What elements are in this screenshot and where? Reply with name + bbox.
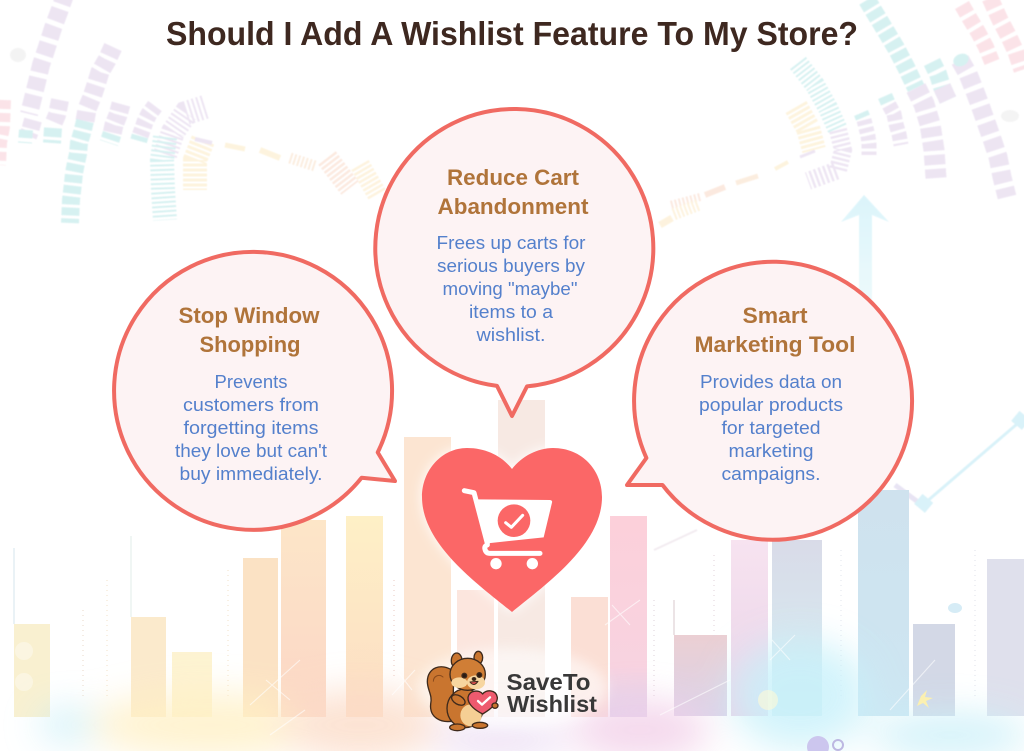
bubble: smart marketing tool: marketing [728, 441, 814, 461]
bubble: smart marketing tool: Provides data on [700, 372, 842, 392]
bubble: stop window shopping: buy immediately. [180, 464, 322, 484]
background: radial sound-wave arcs, left [0, 0, 378, 223]
bubble: smart marketing tool: campaigns. [722, 464, 820, 484]
background: up arrow [841, 195, 889, 300]
bubble: reduce cart abandonment: Abandonment [438, 194, 589, 219]
bubble: reduce cart abandonment: Frees up carts for [436, 233, 586, 253]
bubble: reduce cart abandonment: serious buyers by [437, 256, 585, 276]
bubble: smart marketing tool: Smart [742, 303, 808, 328]
bubble: reduce cart abandonment: Reduce Cart [447, 165, 579, 190]
icon: squirrel mascot [427, 651, 498, 731]
bubble: stop window shopping: Shopping [200, 332, 300, 357]
title: Should I Add A Wishlist Feature To My Store? [166, 15, 858, 52]
bubble: stop window shopping: Prevents [214, 372, 288, 392]
bubble: stop window shopping: they love but can't [175, 441, 327, 461]
bubble: smart marketing tool: popular products [699, 395, 843, 415]
icon: heart with shopping cart [422, 448, 602, 612]
bottom confetti [807, 603, 962, 751]
logo: SaveToWishlist: Wishlist [507, 691, 597, 717]
bubble: stop window shopping [114, 252, 395, 530]
background: bar chart [14, 400, 1024, 717]
logo: SaveToWishlist [417, 648, 607, 731]
bubble: reduce cart abandonment: wishlist. [475, 325, 546, 345]
bubble: reduce cart abandonment: items to a [469, 302, 554, 322]
bubble: stop window shopping: forgetting items [184, 418, 318, 438]
bubble: smart marketing tool: for targeted [722, 418, 820, 438]
bubble: stop window shopping: customers from [183, 395, 319, 415]
bubble: smart marketing tool [627, 262, 912, 540]
background: trend line [654, 411, 1024, 550]
background: radial sound-wave arcs, right [660, 0, 1022, 225]
bubble: smart marketing tool: Marketing Tool [694, 332, 856, 357]
bubble: reduce cart abandonment: moving "maybe" [442, 279, 578, 299]
bubble: reduce cart abandonment [375, 109, 653, 416]
background: sparkles [15, 600, 935, 735]
background: colour washes [38, 640, 1024, 751]
bubble: stop window shopping: Stop Window [178, 303, 320, 328]
logo: SaveToWishlist: SaveTo [506, 669, 590, 695]
